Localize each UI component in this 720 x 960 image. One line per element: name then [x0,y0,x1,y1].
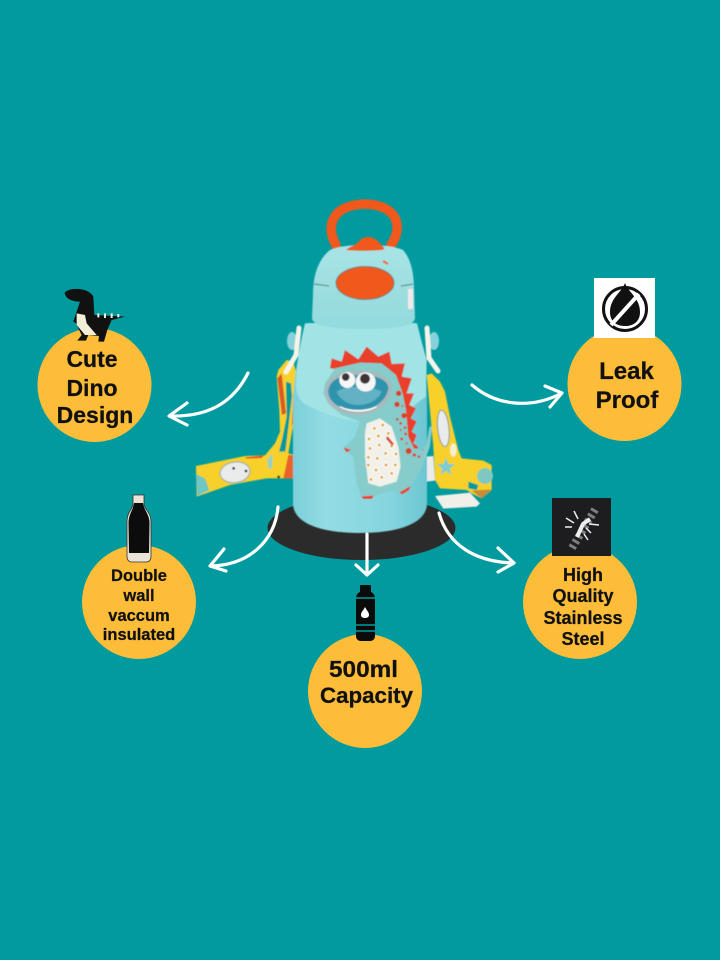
label tag [408,289,413,309]
belly spots [366,423,398,481]
badge: 500ml capacity: Capacity [320,683,413,708]
lid seam [314,284,413,286]
badge: double wall vaccum insulated: insulated [103,626,175,644]
badge: double wall vaccum insulated: vaccum [108,607,170,625]
side lugs [287,332,439,350]
badge: cute dino design [38,328,152,442]
badge: 500ml capacity: 500ml [329,656,398,682]
badge: high quality stainless steel: Quality [552,586,614,606]
arrow to steel [439,513,514,572]
arrow to capacity [356,534,378,575]
dino character [323,347,432,499]
icon: no-leak drop [594,278,655,338]
head and body [323,363,432,497]
red dots [386,391,424,458]
red spikes [330,347,418,453]
badge: 500ml capacity [308,634,422,748]
icon: small bottle [356,585,375,641]
hinge button [346,237,384,251]
badge: high quality stainless steel: High [563,565,603,585]
badge: cute dino design: Dino [66,375,118,401]
arrow to leak proof [472,385,562,407]
lid [312,245,415,329]
icon: black dinosaur [65,289,125,342]
handle ring [331,204,397,245]
bottle body [293,323,427,533]
feet [344,448,410,499]
window mouth [325,371,392,415]
spout cover [336,266,394,300]
badge: cute dino design: Design [57,402,133,428]
badge: leak proof: Proof [596,387,659,414]
badge: leak proof [568,327,682,441]
arrow to cute dino design [169,373,248,425]
badge: leak proof: Leak [599,358,655,385]
left carry strap [196,360,298,497]
icon: steel chain [552,498,611,556]
arrow to double wall [210,507,278,571]
badge: high quality stainless steel: Steel [561,629,605,649]
black base ellipse [268,496,456,560]
front flap [296,323,427,423]
belly [365,418,401,487]
icon: insulated bottle [127,495,151,562]
product: dino water bottle [196,204,493,533]
right carry strap [427,373,493,509]
badge: double wall vaccum insulated [82,545,196,659]
badge: high quality stainless steel: Stainless [543,608,623,628]
white strap loops [286,328,438,372]
badge: high quality stainless steel [523,545,637,659]
badge: cute dino design: Cute [66,346,118,372]
spark mark on lid [383,261,388,264]
badge: double wall vaccum insulated: Double [111,567,167,585]
eyes [339,372,355,388]
badge: double wall vaccum insulated: wall [122,587,155,605]
